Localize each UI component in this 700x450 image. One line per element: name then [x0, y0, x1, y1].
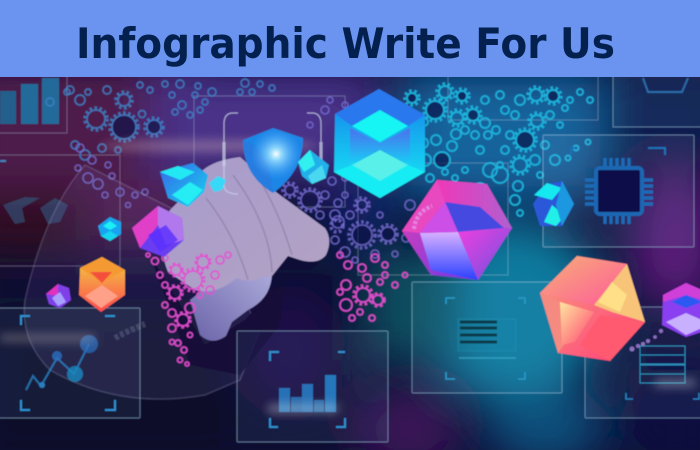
hand pointing at the shield: [162, 157, 329, 341]
panel: bottom right list: [585, 307, 700, 418]
jacket: dark sleeve beneath the cuff: [150, 255, 285, 375]
icon: cyan cube, left of finger: [160, 163, 208, 207]
light flare across the shield: [100, 140, 320, 152]
icon: big cyan cube: [334, 89, 425, 198]
gears: pink cluster on the fist: [146, 252, 231, 366]
panel: centre frame behind the finger: [194, 96, 345, 207]
icon: small cyan cube, far left: [98, 217, 121, 241]
gears: blue and violet cluster, centre: [283, 97, 354, 232]
title banner: [0, 0, 700, 77]
gears: cyan cluster, upper right: [405, 84, 593, 216]
panel: top left bar chart: [0, 70, 67, 133]
panel: left world map: [0, 155, 120, 266]
gears: violet cluster, under the cyan cube: [331, 198, 415, 263]
icon: small purple cube: [46, 284, 71, 308]
icon: shield with glowing touch point: [243, 128, 303, 193]
icon: purple and pink cube: [132, 206, 184, 257]
corner brackets around the shield: [224, 113, 321, 194]
icon: orange cube: [79, 257, 125, 312]
panel: bottom left line chart: [0, 308, 145, 418]
panel: chip: [543, 135, 694, 247]
gears: blue cluster, upper left: [46, 79, 275, 160]
panel: bottom centre bar chart: [237, 331, 388, 442]
panel: frame behind the pink cube: [358, 163, 508, 275]
gears: pink cluster, right of the hand: [337, 252, 408, 321]
panel: centre document: [412, 282, 562, 393]
icon: cube beside the shield: [298, 150, 329, 184]
icon: small cyan cube, right: [533, 181, 574, 226]
panel: top right frame: [613, 66, 700, 127]
title: Infographic Write For Us: [76, 19, 615, 68]
icon: pink and blue cube at right edge: [662, 283, 700, 337]
gears: violet cluster, left of the hand: [75, 144, 148, 208]
beads: chain near bottom right list: [630, 329, 663, 352]
icon: pink and blue cube: [402, 180, 512, 280]
icon: tiny cyan shard on the fingertip: [209, 176, 226, 192]
sleeve outline: [24, 165, 260, 399]
icon: red and orange cube: [540, 256, 645, 361]
panel: top centre frame: [448, 66, 598, 120]
